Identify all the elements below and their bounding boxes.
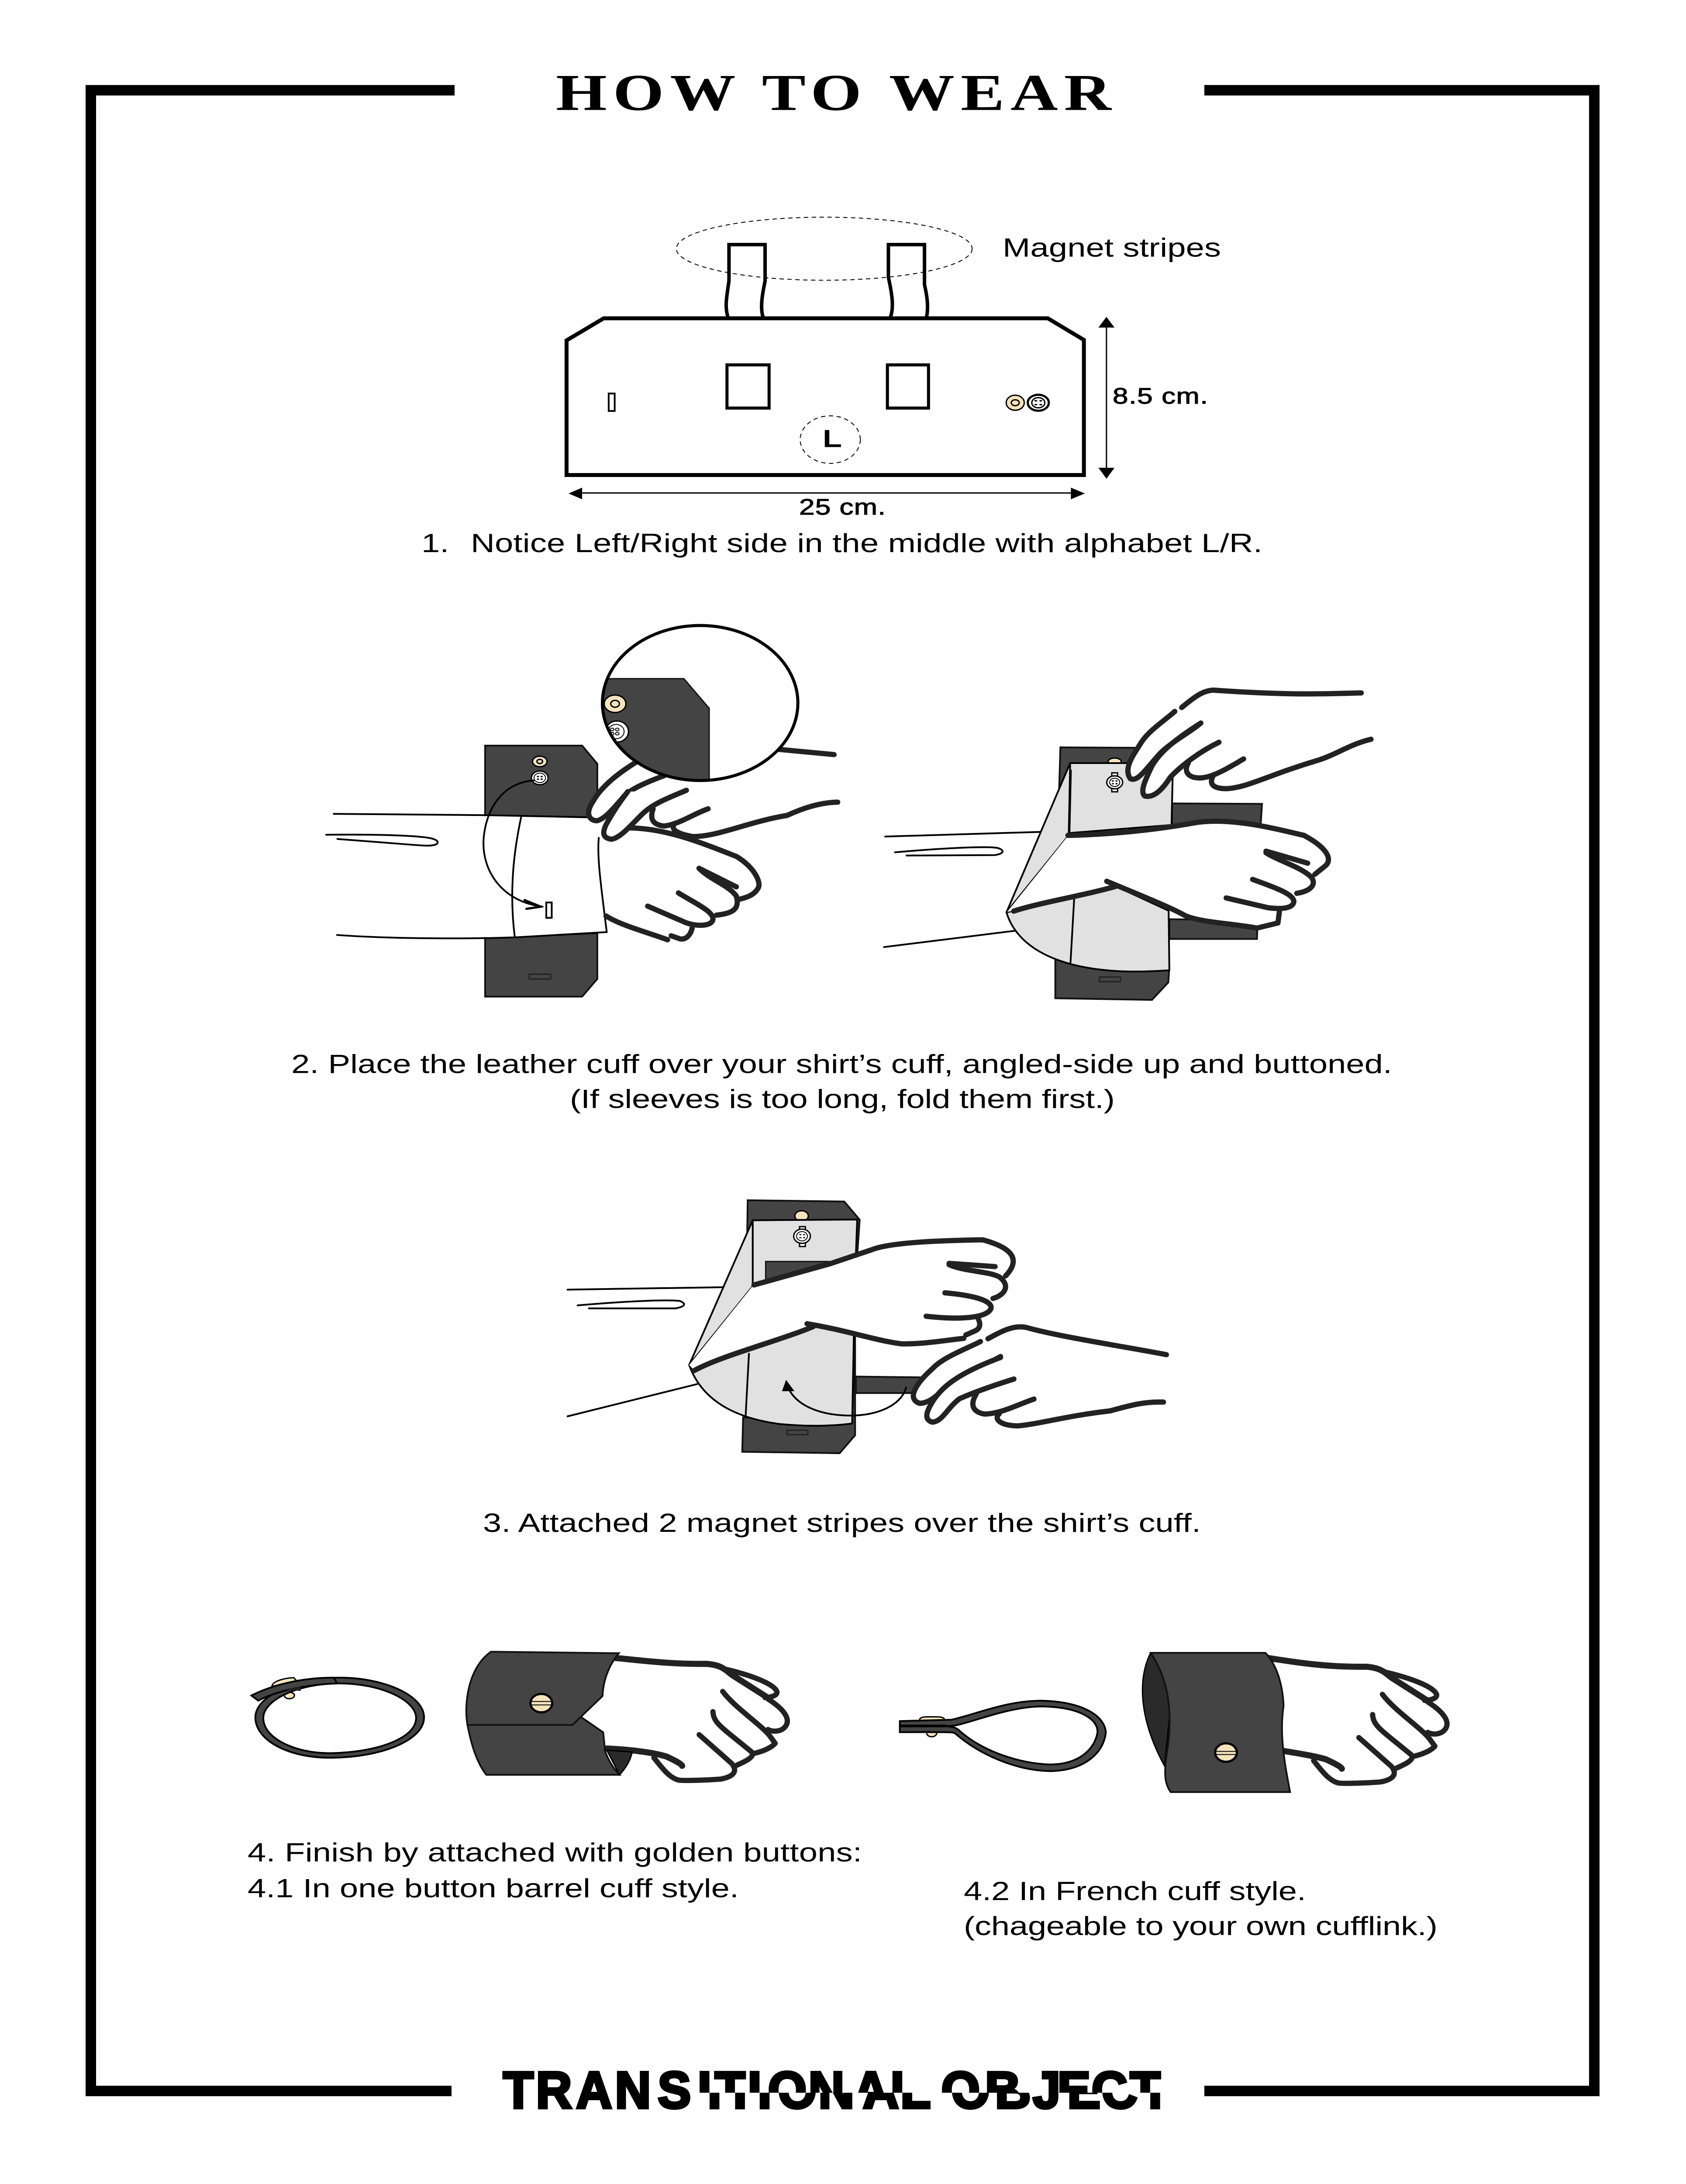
shirt button — [794, 1227, 810, 1247]
panel: step 4.2 illustration — [900, 1653, 1448, 1792]
cuff outline — [566, 318, 1084, 475]
dashed ellipse around magnet stripes — [676, 217, 972, 280]
cuff flat drawing — [566, 217, 1114, 499]
gold button — [533, 756, 547, 767]
forearm lines — [884, 832, 1040, 947]
panel: step 1 flat cuff diagram — [566, 217, 1221, 519]
dashed circle around letter — [800, 416, 860, 463]
fist outline — [1014, 821, 1328, 928]
step 1 caption: 1. — [421, 529, 449, 558]
right window — [887, 365, 928, 408]
step 2 caption: 2. Place the leather cuff over your shirt’s cuff, angled-side up and buttoned. — [291, 1049, 1392, 1079]
loop seam — [900, 1724, 946, 1727]
step 2 note: (If sleeves is too long, fold them first.) — [570, 1084, 1115, 1114]
shirt button — [1107, 773, 1123, 792]
inside of cuff — [1142, 1653, 1171, 1766]
shirt button — [531, 771, 548, 785]
leather cuff top — [485, 746, 597, 817]
slot — [1100, 977, 1121, 981]
fist fill — [689, 1240, 1014, 1371]
gold button peeking — [1108, 758, 1121, 765]
band overlap — [252, 1678, 337, 1701]
top hand white fill — [1128, 690, 1371, 796]
French cuff body — [1151, 1653, 1290, 1792]
inside of cuff — [607, 1750, 632, 1775]
step 4 caption: 4. Finish by attached with golden buttons: — [248, 1838, 862, 1867]
title: HOW TO WEAR — [556, 64, 1112, 121]
folded shirt cuff — [689, 1220, 857, 1426]
panel: step 2 left illustration — [326, 625, 838, 997]
magnet stripe on shirt — [765, 1261, 830, 1280]
fist outline — [694, 1240, 1013, 1371]
hand — [1265, 1658, 1448, 1783]
buttonhole — [609, 394, 615, 411]
fist fill — [1007, 821, 1329, 928]
panel: step 2 right illustration — [884, 690, 1371, 1000]
right magnet stripe — [888, 245, 927, 318]
band tab — [283, 1686, 301, 1691]
gold button behind band — [272, 1678, 297, 1699]
logo: Transitional Object: TRANSITIONAL OBJECT — [503, 2061, 1160, 2119]
step 4.2 note: (chageable to your own cufflink.) — [964, 1911, 1438, 1941]
slot on cuff — [529, 974, 551, 979]
letter L: L — [823, 425, 842, 453]
buttonhole — [546, 902, 552, 918]
leather band ring — [255, 1678, 424, 1758]
step 3 caption: 3. Attached 2 magnet stripes over the shirt’s cuff. — [483, 1508, 1201, 1538]
curved arrow — [483, 781, 543, 909]
step 1 caption: Notice Left/Right side in the middle with alphabet L/R. — [471, 529, 1262, 558]
lower hand — [914, 1327, 1166, 1426]
fist — [606, 828, 759, 940]
logo: Transitional Object: TRANSITIONAL OBJECT — [503, 2061, 1170, 2119]
cuff lower flap — [468, 1717, 620, 1775]
shirt button — [1028, 395, 1049, 411]
step 4.1 caption: 4.1 In one button barrel cuff style. — [248, 1873, 739, 1903]
width arrow — [569, 487, 1085, 499]
folded shirt cuff — [1007, 763, 1173, 971]
curved arrow — [782, 1380, 906, 1416]
height arrow — [1098, 317, 1114, 479]
leather cuff bottom — [485, 933, 597, 997]
width label: 25 cm. — [799, 495, 886, 519]
inner fold lines — [1069, 771, 1074, 962]
panel: step 3 illustration — [568, 1200, 1166, 1453]
leather cuff pieces — [1055, 747, 1262, 1000]
forearm lines — [568, 1287, 724, 1417]
golden button — [531, 1694, 552, 1712]
panel: step 4.1 illustration — [252, 1652, 788, 1780]
magnet stripes label: Magnet stripes — [1003, 233, 1221, 263]
sleeve outlines — [326, 814, 607, 938]
cuff upper flap — [466, 1652, 619, 1725]
buttoning hand — [589, 749, 838, 839]
gold button peeking — [795, 1211, 808, 1221]
step 4.2 caption: 4.2 In French cuff style. — [964, 1876, 1306, 1906]
left magnet stripe — [726, 245, 765, 318]
left window — [727, 365, 769, 408]
leather cuff pieces — [742, 1200, 922, 1453]
logo: Transitional Object — [502, 2070, 1162, 2110]
gold cufflink — [920, 1717, 945, 1737]
height label: 8.5 cm. — [1113, 384, 1208, 408]
magnified detail circle — [595, 625, 798, 785]
hand — [605, 1658, 788, 1780]
gold button — [1006, 395, 1024, 410]
fold line — [745, 1354, 749, 1417]
top hand — [1128, 690, 1371, 796]
leather loop — [900, 1701, 1106, 1771]
shirt sleeve fill — [485, 816, 607, 938]
slot — [787, 1430, 808, 1435]
golden button — [1215, 1743, 1237, 1762]
